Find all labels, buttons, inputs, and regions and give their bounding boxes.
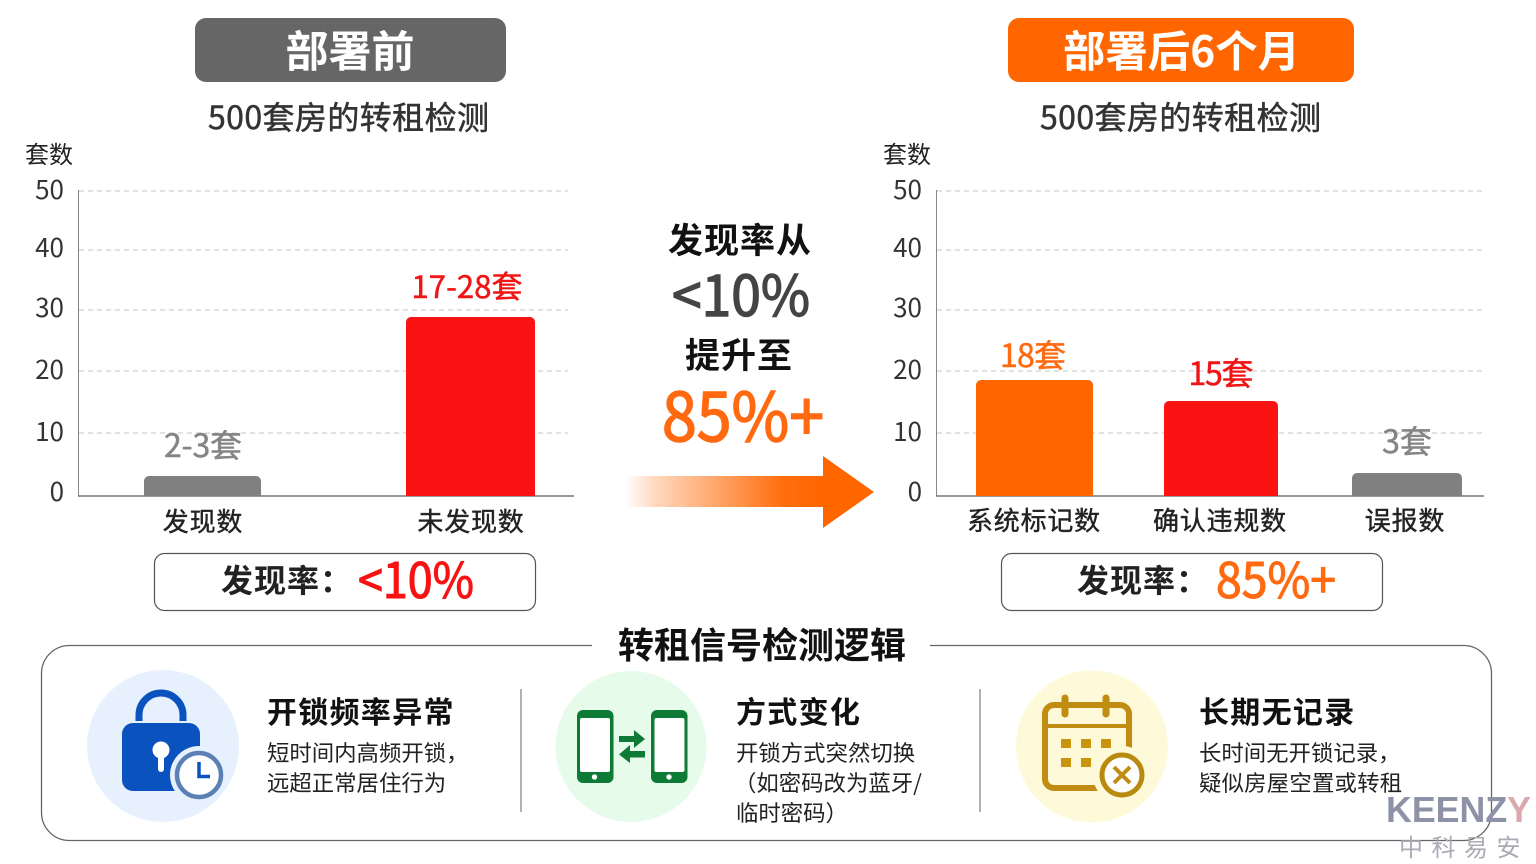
heading: detection logic: 转租信号检测逻辑 [618, 617, 906, 669]
center comparison message: 85%+ [662, 364, 824, 461]
bar chart: before: 未发现数 [417, 502, 525, 539]
callout: after rate [1002, 542, 1382, 613]
icon: calendar with cross [1016, 670, 1168, 822]
bar chart: after: 0 [908, 472, 922, 509]
bar chart: after: 15套 [1188, 349, 1254, 395]
bar chart: before: 50 [35, 170, 64, 207]
subtitle: before: 500套房的转租检测 [208, 93, 489, 139]
bar chart: after: 20 [893, 350, 922, 387]
heading: before: 部署前 [286, 18, 414, 80]
text: no long-term records: 长期无记录 [1199, 688, 1356, 732]
watermark: KEENZY logo [1386, 789, 1531, 863]
text: unlock frequency: 短时间内高频开锁， [267, 736, 469, 768]
callout: after rate: 85%+ [1216, 542, 1336, 613]
text: method change: （如密码改为蓝牙/ [734, 766, 922, 798]
heading: after: 部署后6个月 [1063, 18, 1300, 80]
bar chart: before: 20 [35, 350, 64, 387]
bar chart: after: 18套 [1000, 331, 1066, 377]
callout: before rate: 发现率： [221, 556, 353, 602]
bar chart: after [883, 135, 1484, 538]
bar chart: before: 10 [35, 412, 64, 449]
callout: before rate [154, 542, 536, 613]
center comparison message [662, 213, 824, 461]
watermark: KEENZY logo: KEENZY [1386, 789, 1531, 830]
bar chart: before: 0 [50, 472, 64, 509]
bar chart: after: 30 [893, 288, 922, 325]
bar chart: after: 10 [893, 412, 922, 449]
text: unlock frequency: 开锁频率异常 [267, 688, 455, 732]
text: no long-term records: 疑似房屋空置或转租 [1199, 766, 1402, 798]
bar chart: before: 17-28套 [412, 262, 522, 307]
center comparison message: <10% [672, 252, 810, 333]
bar chart: before: 30 [35, 288, 64, 325]
bar chart: after: 套数 [883, 135, 931, 170]
bar chart: before [25, 135, 574, 539]
icon: lock with clock [87, 670, 239, 822]
bar chart: after: 误报数 [1365, 501, 1445, 538]
heading: after [1008, 18, 1354, 82]
bar chart: after: 50 [893, 170, 922, 207]
bar chart: before: 40 [35, 228, 64, 265]
text: method change [734, 688, 922, 828]
bar chart: after: 3套 [1382, 417, 1432, 463]
callout: before rate: <10% [358, 542, 474, 613]
bar chart: before: 发现数 [163, 502, 243, 539]
text: unlock frequency [267, 688, 469, 798]
callout: after rate: 发现率： [1077, 556, 1209, 602]
text: no long-term records [1199, 688, 1402, 798]
heading: before [195, 18, 506, 82]
panel: after deployment [883, 18, 1484, 613]
panel: detection logic [42, 617, 1492, 840]
center comparison message: 提升至 [685, 328, 793, 379]
text: method change: 开锁方式突然切换 [736, 736, 915, 768]
panel: before deployment [25, 18, 574, 613]
bar chart: after: 确认违规数 [1153, 501, 1287, 538]
bar chart: before: 2-3套 [164, 421, 242, 467]
bar chart: before: 套数 [25, 135, 73, 170]
subtitle: after: 500套房的转租检测 [1040, 93, 1321, 139]
text: method change: 临时密码） [736, 796, 848, 828]
watermark: KEENZY logo: 中科易安 [1399, 828, 1529, 863]
text: method change: 方式变化 [736, 688, 861, 732]
bar chart: after: 40 [893, 228, 922, 265]
text: unlock frequency: 远超正常居住行为 [267, 766, 446, 798]
center comparison message: 发现率从 [668, 213, 812, 264]
icon: phones swapping [556, 671, 706, 822]
bar chart: after: 系统标记数 [967, 501, 1101, 538]
text: no long-term records: 长时间无开锁记录， [1199, 736, 1401, 768]
arrow: improvement [625, 456, 874, 528]
